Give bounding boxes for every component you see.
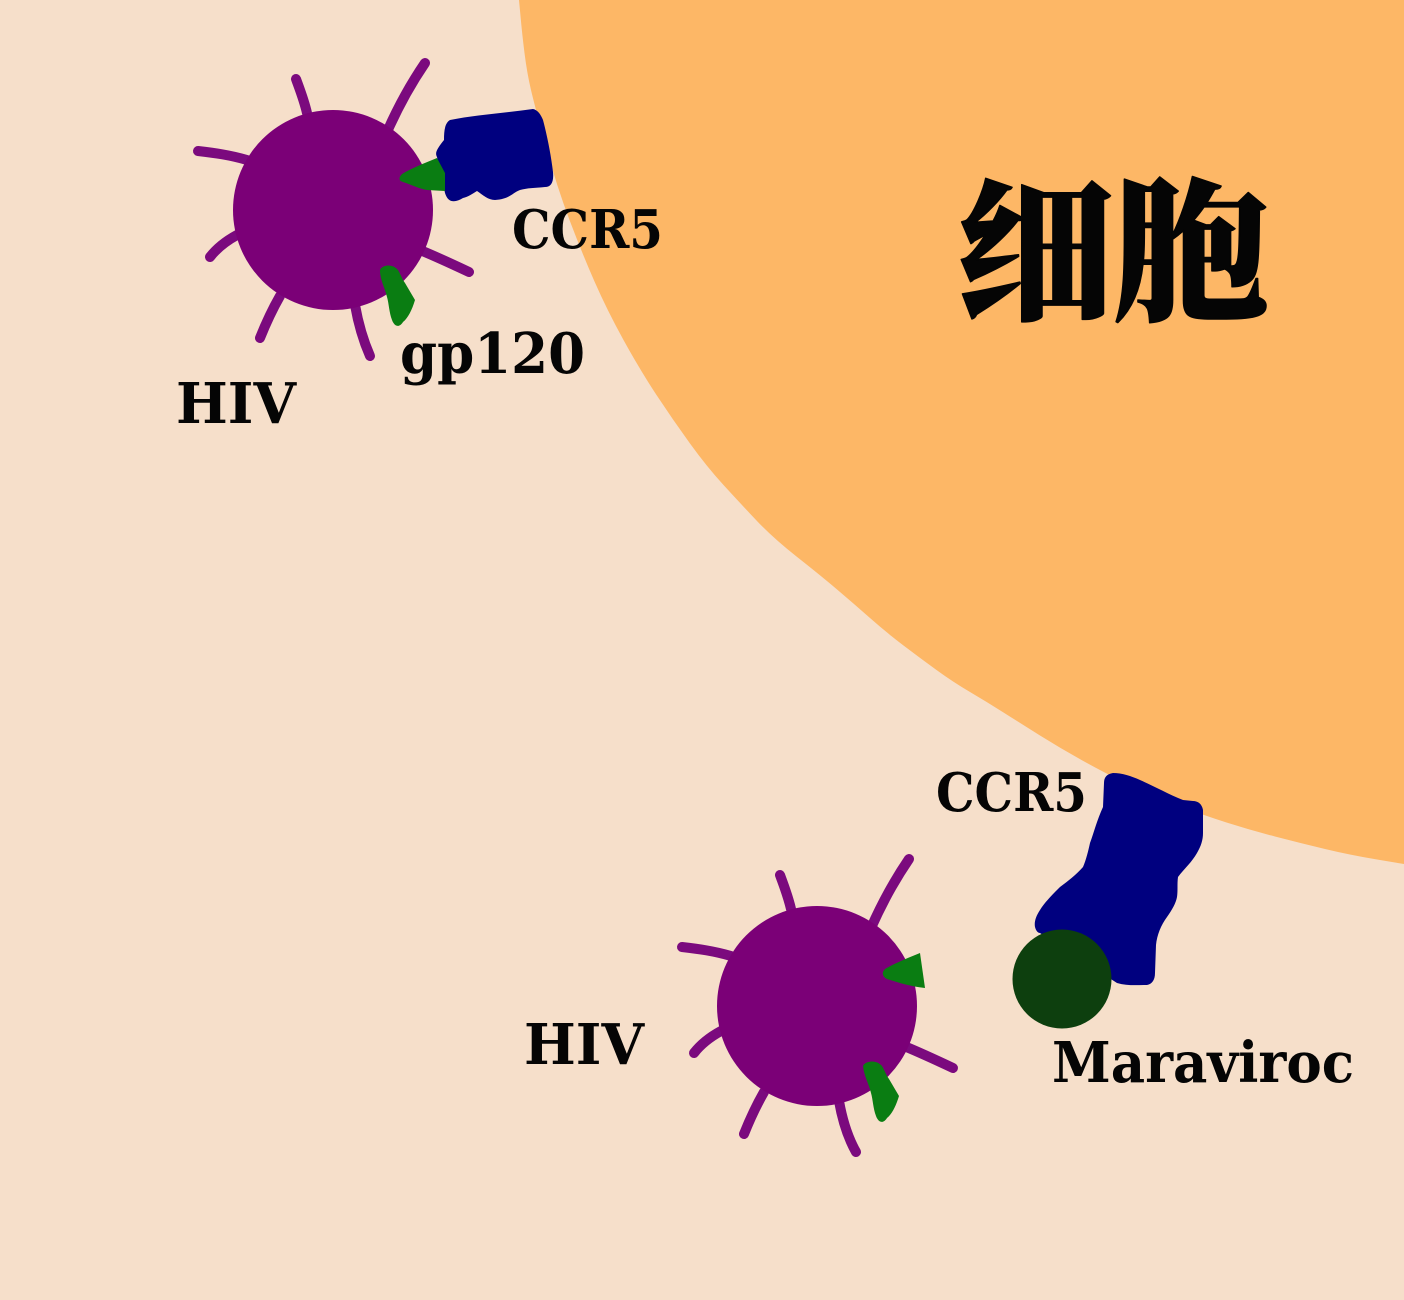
cell label: 细胞 — [957, 132, 1269, 353]
label HIV bottom: HIV — [524, 1012, 646, 1078]
label gp120: gp120 — [400, 321, 585, 387]
gp120 bottom — [863, 1061, 899, 1122]
HIV virus bottom — [682, 859, 953, 1152]
Maraviroc molecule — [1012, 930, 1112, 1028]
gp120 bottom — [380, 265, 415, 326]
gp120 right — [883, 953, 925, 988]
label Maraviroc: Maraviroc — [1052, 1030, 1354, 1096]
virus body — [233, 110, 433, 310]
CCR5 receptor top — [436, 109, 553, 201]
label CCR5 top: CCR5 — [512, 199, 663, 261]
CCR5 receptor bottom — [1035, 773, 1203, 985]
virus spikes — [198, 63, 469, 356]
gp120 docked tip — [399, 158, 445, 191]
cell body — [519, 0, 1404, 864]
label CCR5 bottom: CCR5 — [936, 762, 1087, 824]
virus body — [717, 906, 917, 1106]
HIV virus top — [198, 63, 469, 356]
virus spikes — [682, 859, 953, 1152]
label HIV top: HIV — [176, 371, 298, 437]
